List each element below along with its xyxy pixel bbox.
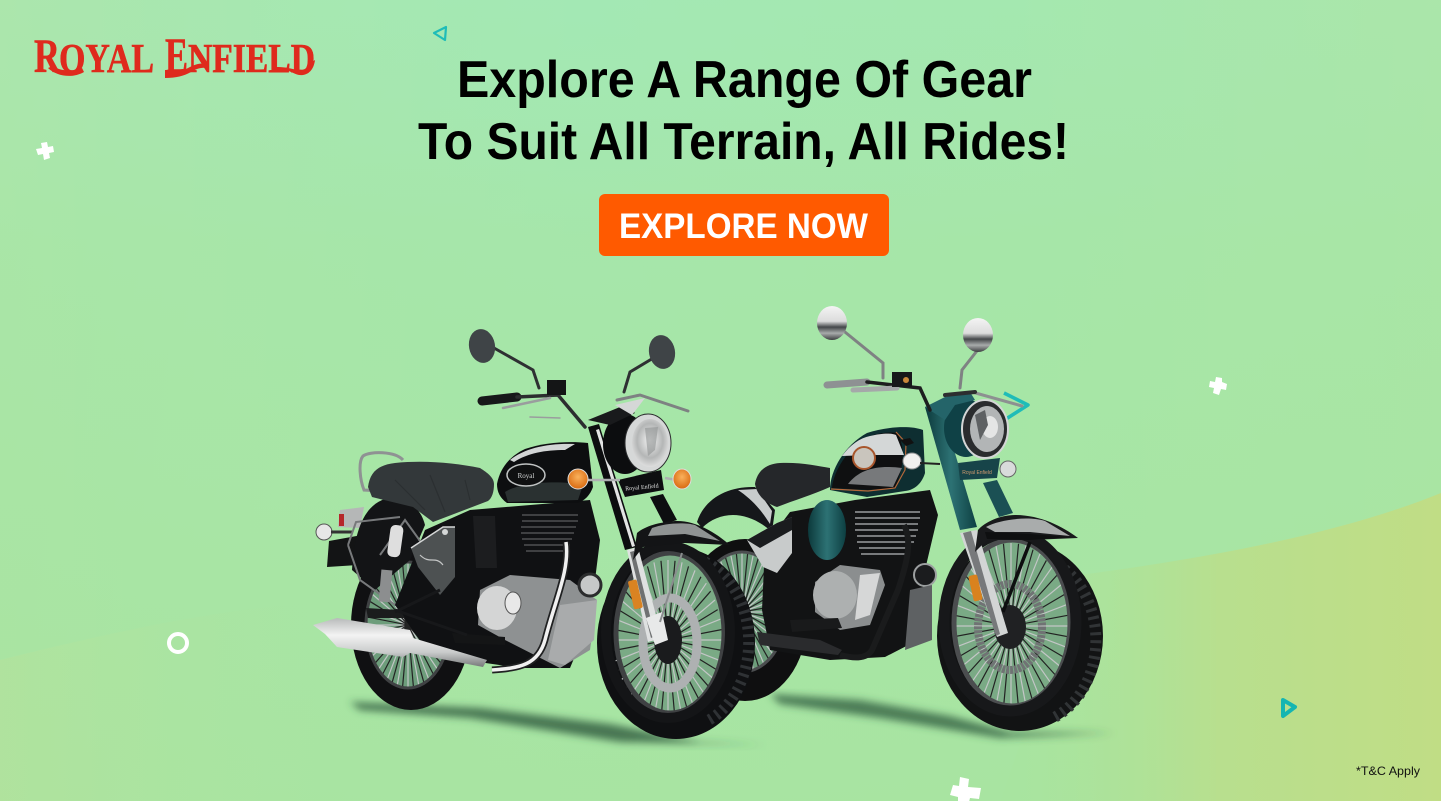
motorcycle: black Bullet: Royal Enfield	[625, 483, 659, 492]
rear wheel	[683, 539, 807, 701]
heading	[418, 51, 1069, 171]
nacelle	[618, 470, 664, 497]
fork	[588, 424, 637, 550]
exhaust	[757, 632, 842, 655]
fork	[925, 403, 977, 530]
headlamp	[625, 414, 671, 472]
chrome mirrors	[817, 306, 847, 340]
footpeg	[790, 618, 842, 632]
logo: Royal Enfield: E	[165, 27, 188, 83]
heading: To Suit All Terrain, All Rides!	[418, 113, 1069, 171]
logo: Royal Enfield: OYAL	[59, 35, 154, 81]
crank case	[815, 565, 885, 630]
crash guard	[840, 525, 908, 657]
handlebar	[482, 348, 688, 427]
engine fins	[855, 512, 920, 554]
fender stay	[660, 553, 682, 622]
heading: Explore A Range Of Gear	[457, 51, 1032, 109]
footrest	[366, 608, 405, 618]
signals	[903, 453, 921, 469]
side panel	[411, 527, 455, 595]
frame and engine dark mass	[762, 490, 938, 660]
seat	[368, 462, 494, 522]
crash guard	[492, 542, 567, 670]
steering rear leg	[983, 480, 1013, 517]
tail lamp and licence plate	[338, 507, 364, 528]
fender stay	[1003, 542, 1030, 612]
battery box	[473, 516, 497, 568]
logo: Royal Enfield	[34, 27, 315, 83]
round side cover	[808, 500, 846, 560]
handlebar	[827, 328, 1022, 410]
tank	[497, 442, 593, 503]
crank case	[478, 575, 597, 668]
frame and engine dark mass	[395, 500, 600, 668]
turn signals	[588, 478, 677, 480]
motorcycle: teal Bullet: Royal Enfield	[962, 470, 992, 476]
front fender	[633, 521, 730, 560]
ground shadows	[350, 694, 1115, 745]
engine fins	[521, 515, 578, 551]
headlamp shell	[944, 399, 988, 457]
motorcycle: black Bullet	[313, 327, 755, 739]
grab rail and saddle guard	[348, 453, 423, 605]
seat	[755, 463, 830, 507]
terms and conditions note: *T&C Apply	[1356, 764, 1420, 778]
headlamp	[962, 400, 1008, 458]
mirrors	[466, 327, 498, 365]
front wheel	[937, 533, 1103, 731]
button: explore now	[599, 194, 889, 256]
exhaust	[313, 618, 487, 667]
fork rear leg	[650, 494, 677, 524]
logo: Royal Enfield: NFIELD	[188, 35, 315, 81]
rear fender	[352, 499, 425, 590]
front wheel	[597, 546, 755, 739]
motorcycle: teal Bullet	[683, 306, 1103, 731]
logo: Royal Enfield: R	[34, 30, 61, 83]
button: explore now: EXPLORE NOW	[619, 207, 868, 246]
rear wheel	[351, 540, 471, 710]
headlamp shell	[603, 414, 647, 474]
headlamp nacelle	[958, 458, 1000, 480]
front fender	[975, 515, 1078, 552]
tank	[830, 427, 925, 497]
rear shock	[387, 524, 404, 558]
motorcycle: black Bullet: Royal	[518, 472, 534, 480]
side panel	[747, 517, 792, 573]
rear fender	[697, 487, 775, 532]
